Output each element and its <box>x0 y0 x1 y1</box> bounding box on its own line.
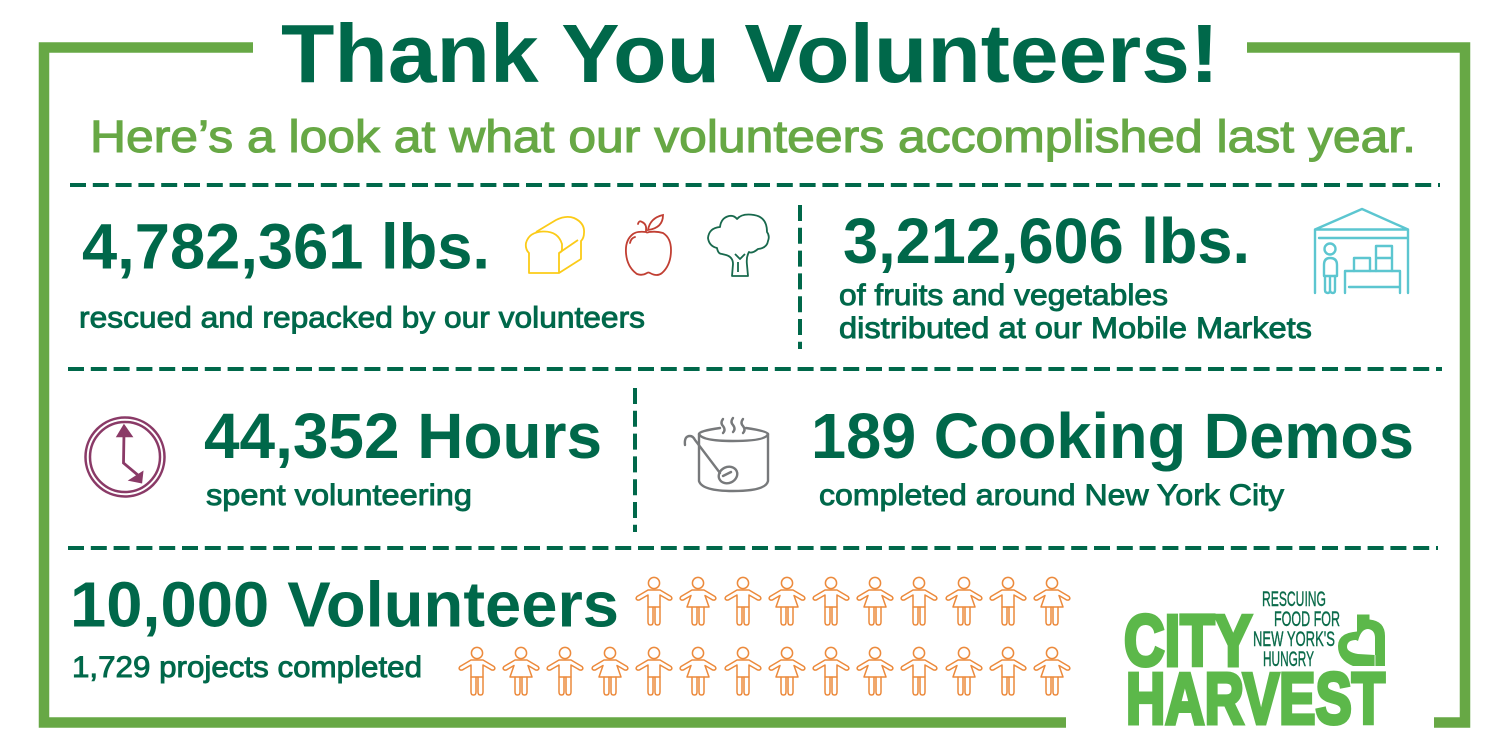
title: Thank You Volunteers! <box>281 7 1219 100</box>
rescued figure: 4,782,361 lbs. <box>82 210 490 282</box>
markets figure: 3,212,606 lbs. <box>843 205 1250 277</box>
logo wordmark: HARVEST <box>1126 660 1385 740</box>
logo heart mark <box>1338 614 1385 666</box>
icon: pot with ladle <box>685 418 768 491</box>
icon: apple <box>626 215 671 275</box>
demos caption: completed around New York City <box>819 479 1284 512</box>
hours caption: spent volunteering <box>206 479 472 512</box>
demos figure: 189 Cooking Demos <box>811 400 1414 472</box>
icon: bread <box>526 217 584 273</box>
logo tagline: HUNGRY <box>1263 648 1314 671</box>
projects caption: 1,729 projects completed <box>72 651 422 684</box>
subtitle: Here’s a look at what our volunteers accomplished last year. <box>90 111 1416 162</box>
logo tagline: NEW YORK'S <box>1253 628 1335 651</box>
logo tagline <box>1253 588 1340 671</box>
panel: cooking demos <box>685 400 1414 512</box>
panel: hours <box>86 400 602 512</box>
panel: pounds rescued <box>79 210 769 334</box>
markets caption: of fruits and vegetables <box>839 279 1168 312</box>
panel: volunteers <box>70 568 1070 695</box>
rescued caption: rescued and repacked by our volunteers <box>79 302 645 334</box>
logo tagline: FOOD FOR <box>1274 608 1340 631</box>
volunteers figure: 10,000 Volunteers <box>70 568 619 640</box>
logo wordmark <box>1124 602 1385 740</box>
logo wordmark: CITY <box>1124 602 1252 682</box>
icon: people row two <box>459 647 1070 695</box>
hours figure: 44,352 Hours <box>204 400 602 472</box>
icon: market stall <box>1315 209 1408 293</box>
icon: clock <box>86 418 164 496</box>
icon: broccoli <box>708 214 769 276</box>
panel: mobile markets <box>839 205 1408 345</box>
logo: City Harvest <box>1124 588 1385 740</box>
panel: mobile markets: distributed at our Mobile Markets <box>839 312 1312 345</box>
icon: people row one <box>636 577 1070 625</box>
logo tagline: RESCUING <box>1262 588 1326 611</box>
